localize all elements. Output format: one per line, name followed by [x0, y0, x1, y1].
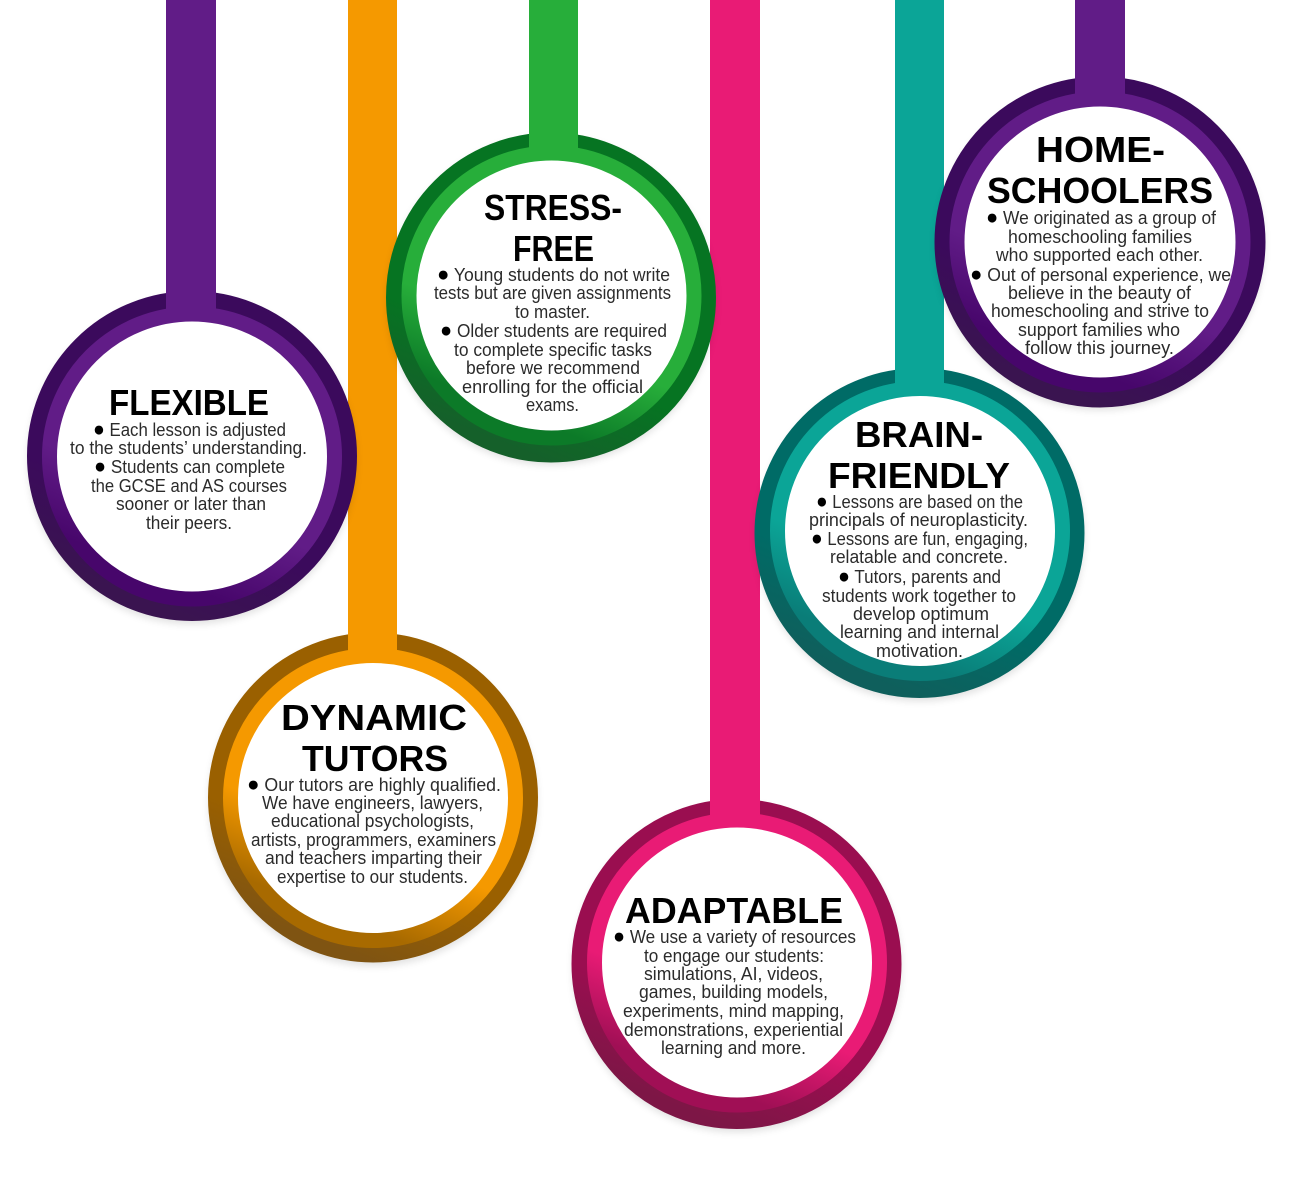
- text: flexible body: sooner or later than: [116, 494, 266, 514]
- text: stress-free body: FREE: [513, 228, 594, 269]
- text: brain-friendly body: ● Lessons are fun, engaging,: [811, 527, 1028, 550]
- panel: flexible: [28, 0, 356, 624]
- text: adaptable body: ADAPTABLE: [625, 890, 843, 931]
- text: homeschoolers body: homeschooling families: [1008, 227, 1192, 247]
- text: homeschoolers body: ● Out of personal experience, we: [970, 263, 1231, 286]
- panel: adaptable: [573, 0, 901, 1132]
- text: stress-free body: tests but are given assignments: [434, 283, 671, 303]
- text: brain-friendly body: ● Lessons are based on the: [816, 490, 1023, 513]
- text: flexible body: the GCSE and AS courses: [91, 476, 287, 496]
- text: dynamic tutors body: artists, programmers, examiners: [251, 830, 496, 850]
- text: homeschoolers body: HOME-: [1036, 129, 1165, 170]
- text: adaptable body: experiments, mind mapping,: [623, 1001, 844, 1021]
- panel: stress-free: [387, 0, 715, 465]
- ring: brain-friendly: [768, 365, 1072, 685]
- text: homeschoolers body: follow this journey.: [1025, 338, 1174, 358]
- text: adaptable body: learning and more.: [661, 1038, 806, 1058]
- text: dynamic tutors body: TUTORS: [302, 738, 448, 779]
- text: adaptable body: games, building models,: [639, 982, 828, 1002]
- text: brain-friendly body: BRAIN-: [855, 414, 983, 455]
- text: dynamic tutors body: ● Our tutors are highly qualified.: [247, 773, 501, 796]
- text: dynamic tutors body: educational psychologists,: [271, 811, 474, 831]
- text: dynamic tutors body: DYNAMIC: [281, 697, 467, 738]
- text: stress-free body: to master.: [515, 302, 590, 322]
- text: dynamic tutors body: and teachers imparting their: [265, 848, 482, 868]
- text: flexible body: FLEXIBLE: [109, 382, 269, 423]
- text: stress-free body: exams.: [526, 395, 579, 415]
- text: homeschoolers body: [960, 102, 1240, 382]
- text: homeschoolers body: believe in the beauty of: [1008, 283, 1192, 303]
- text: stress-free body: ● Young students do not write: [437, 263, 670, 286]
- text: adaptable body: to engage our students:: [644, 946, 824, 966]
- panel: homeschoolers: [936, 0, 1264, 410]
- text: homeschoolers body: ● We originated as a group of: [986, 206, 1217, 229]
- text: homeschoolers body: who supported each other.: [995, 245, 1203, 265]
- text: adaptable body: ● We use a variety of resources: [613, 925, 856, 948]
- panel: brain-friendly: [756, 0, 1084, 701]
- text: flexible body: [52, 316, 332, 596]
- ribbon: purple right: [1075, 0, 1125, 125]
- ribbon: teal: [895, 0, 944, 415]
- text: adaptable body: demonstrations, experiential: [624, 1020, 843, 1040]
- text: brain-friendly body: relatable and concrete.: [830, 547, 1008, 567]
- text: stress-free body: before we recommend: [466, 358, 640, 378]
- text: brain-friendly body: develop optimum: [853, 604, 989, 624]
- text: stress-free body: to complete specific tasks: [454, 340, 652, 360]
- text: brain-friendly body: learning and internal: [840, 622, 999, 642]
- text: brain-friendly body: [780, 390, 1060, 670]
- ring: stress-free: [399, 130, 703, 450]
- ribbon: purple left: [166, 0, 216, 340]
- text: stress-free body: enrolling for the official: [462, 377, 643, 397]
- text: dynamic tutors body: We have engineers, lawyers,: [262, 793, 483, 813]
- text: flexible body: their peers.: [146, 513, 232, 533]
- text: dynamic tutors body: [233, 658, 513, 938]
- text: brain-friendly body: FRIENDLY: [828, 455, 1010, 496]
- text: homeschoolers body: homeschooling and strive to: [991, 301, 1209, 321]
- ribbon: pink: [710, 0, 760, 845]
- text: brain-friendly body: motivation.: [876, 641, 963, 661]
- text: adaptable body: simulations, AI, videos,: [644, 964, 823, 984]
- text: brain-friendly body: principals of neuroplasticity.: [809, 510, 1028, 530]
- text: flexible body: ● Students can complete: [94, 455, 285, 478]
- ring: homeschoolers: [948, 73, 1252, 394]
- text: brain-friendly body: ● Tutors, parents and: [838, 565, 1001, 588]
- text: stress-free body: [412, 155, 692, 435]
- ribbon: orange: [348, 0, 397, 680]
- text: stress-free body: STRESS-: [484, 187, 622, 228]
- panel: dynamic tutors: [209, 0, 537, 966]
- ring: adaptable: [584, 795, 888, 1116]
- text: brain-friendly body: students work together to: [822, 586, 1016, 606]
- text: homeschoolers body: SCHOOLERS: [987, 170, 1213, 211]
- text: adaptable body: [597, 822, 877, 1102]
- text: dynamic tutors body: expertise to our students.: [277, 867, 468, 887]
- ribbon: green: [529, 0, 578, 175]
- text: flexible body: ● Each lesson is adjusted: [93, 418, 286, 441]
- ring: flexible: [40, 287, 344, 608]
- text: flexible body: to the students’ understanding.: [70, 438, 307, 458]
- ring: dynamic tutors: [221, 630, 525, 950]
- text: stress-free body: ● Older students are required: [440, 319, 667, 342]
- text: homeschoolers body: support families who: [1018, 320, 1180, 340]
